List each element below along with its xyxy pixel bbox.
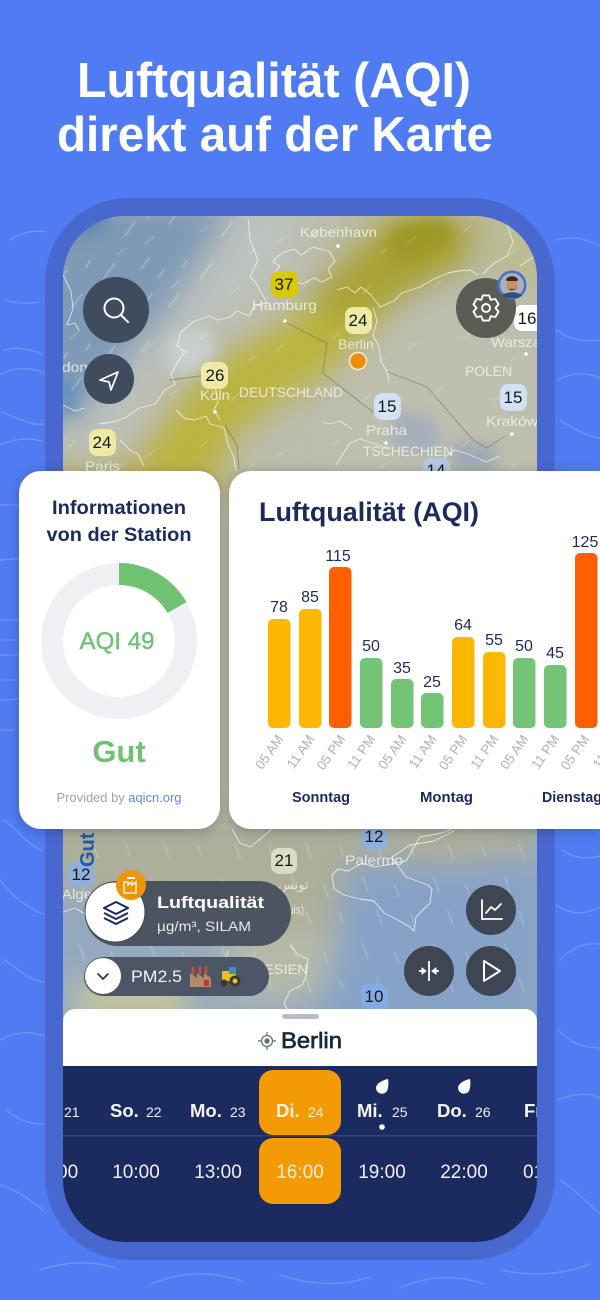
location header: [63, 1009, 537, 1066]
navigation button: [84, 354, 134, 404]
station title: von der Station: [46, 524, 192, 546]
time axis labels: 05 PM: [436, 732, 470, 773]
chart button: [466, 885, 516, 935]
bar values: 115: [325, 548, 351, 565]
map colour fields: north: [40, 200, 560, 485]
time axis labels: 11 PM: [528, 732, 562, 772]
phone frame: [45, 198, 555, 1260]
time axis labels: 05 AM: [497, 732, 531, 772]
map colour fields: south: [63, 829, 537, 1019]
bar values: 85: [301, 589, 319, 606]
title: [57, 54, 493, 162]
bar values: 35: [393, 660, 411, 677]
city labels: Paris: [85, 458, 120, 474]
AQI donut gauge: [52, 563, 186, 708]
divider: [63, 1135, 537, 1136]
bar values: [270, 534, 598, 691]
city labels: [62, 224, 541, 977]
day labels: Mi.: [357, 1100, 383, 1121]
bar values: 25: [423, 674, 441, 691]
time axis labels: 05 AM: [252, 732, 286, 772]
target icon: [258, 1032, 276, 1050]
value badges: 12: [72, 865, 90, 884]
bar values: 55: [485, 632, 503, 649]
city labels: ESIEN: [264, 961, 308, 977]
time axis labels: 05 PM: [314, 732, 348, 773]
day labels: Di.: [276, 1100, 300, 1121]
hour labels: 00: [57, 1162, 78, 1183]
pollutant selector pill: [84, 957, 269, 996]
compare button: [404, 946, 454, 996]
city labels: Kraków: [486, 413, 539, 429]
rain drops: [376, 1079, 470, 1130]
time axis labels: [252, 732, 600, 773]
day labels: Do.: [437, 1100, 467, 1121]
tractor icon: [220, 967, 240, 986]
bottom sheet: timeline: 25: [392, 1104, 408, 1120]
city labels: uis): [288, 902, 304, 917]
selected day and time tiles: [259, 1070, 341, 1135]
day labels: [292, 790, 600, 806]
city labels: København: [300, 224, 377, 240]
value badges: 21: [275, 851, 293, 870]
layer pill: Luftqualität: Luftqualität: [157, 893, 264, 912]
bar values: 50: [362, 638, 380, 655]
title: direkt auf der Karte: [57, 108, 493, 162]
layer pill: Luftqualität: µg/m³, SILAM: [157, 918, 251, 934]
station title: [46, 497, 192, 546]
city labels: Köln: [200, 387, 230, 403]
hour labels: 10:00: [112, 1162, 160, 1183]
rotated label Gut: Gut: [77, 832, 99, 867]
city labels: don: [62, 359, 88, 375]
city dots: [213, 244, 528, 445]
hour labels: 13:00: [194, 1162, 242, 1183]
wind streaks: [63, 216, 537, 1019]
value badges: 24: [349, 311, 367, 330]
city labels: POLEN: [465, 363, 512, 379]
value badges: 14: [427, 461, 445, 480]
search button: [83, 277, 149, 343]
bar values: 50: [515, 638, 533, 655]
bars: [268, 553, 598, 728]
hour labels: [63, 1164, 537, 1178]
bar values: 125: [572, 534, 598, 551]
day labels: Montag: [420, 790, 473, 806]
day labels: [110, 1104, 537, 1117]
right card: AQI bar chart: [229, 471, 600, 829]
bottom sheet: timeline: 21: [64, 1104, 80, 1120]
settings button: [456, 278, 516, 338]
status Gut: Gut: [92, 734, 146, 769]
provider credit: Provided by aqicn.org: [56, 791, 182, 805]
user avatar: [498, 270, 526, 300]
time axis labels: 05 AM: [375, 732, 409, 772]
time axis labels: 11 AM: [284, 732, 317, 771]
chart title: Luftqualität (AQI): [259, 497, 479, 527]
city labels: DEUTSCHLAND: [239, 384, 343, 400]
city labels: Warsza: [491, 334, 541, 350]
value badges: 26: [206, 366, 224, 385]
bottom sheet: timeline: 22: [146, 1104, 162, 1120]
day labels: Sonntag: [292, 790, 350, 806]
city labels: Hamburg: [252, 297, 317, 313]
hour labels: 16:00: [276, 1162, 324, 1183]
location header: Berlin: [281, 1028, 342, 1053]
value badges: 16: [518, 309, 536, 328]
selected location marker: [350, 352, 366, 370]
day labels: Fr: [524, 1100, 542, 1121]
value badges: 10: [365, 987, 383, 1006]
station title: Informationen: [52, 497, 186, 519]
factory icon: [190, 966, 211, 987]
value badges: 37: [275, 275, 293, 294]
play button: [466, 946, 516, 996]
layers icon: [104, 902, 128, 924]
hour labels: 01: [523, 1162, 544, 1183]
map screen: [63, 216, 537, 1020]
bottom sheet: timeline: 24: [308, 1104, 324, 1120]
city labels: Berlin: [338, 336, 374, 352]
AQI donut gauge: AQI 49: [80, 628, 154, 655]
left card: station info: [19, 471, 220, 829]
value badges: 12: [365, 827, 383, 846]
bottom sheet: timeline: [57, 1009, 544, 1242]
value badges: 15: [504, 388, 522, 407]
city labels: Alge: [62, 886, 92, 902]
hour labels: 19:00: [358, 1162, 406, 1183]
city labels: Palermo: [345, 852, 403, 868]
bar values: 45: [546, 645, 564, 662]
value badges: 15: [378, 397, 396, 416]
bar values: 78: [270, 599, 288, 616]
city labels: تونس: [278, 877, 309, 893]
time axis labels: 05 PM: [558, 732, 592, 773]
time axis labels: 11 PM: [344, 732, 378, 772]
day labels: So.: [110, 1100, 139, 1121]
city labels: Praha: [366, 422, 407, 438]
time axis labels: 11 AM: [406, 732, 439, 771]
bottom sheet: timeline: 26: [475, 1104, 491, 1120]
title: Luftqualität (AQI): [77, 54, 471, 108]
value badges: 24: [93, 433, 111, 452]
coastlines and borders: [63, 218, 538, 470]
bottom sheet: timeline: 23: [230, 1104, 246, 1120]
value badges: [68, 271, 544, 1011]
orange factory badge: [116, 870, 146, 900]
layer pill: Luftqualität: [85, 870, 291, 946]
bar values: 64: [454, 617, 472, 634]
city labels: TSCHECHIEN: [363, 443, 453, 459]
pollutant selector pill: PM2.5: [131, 967, 182, 986]
hour labels: 22:00: [440, 1162, 488, 1183]
day labels: Mo.: [190, 1100, 222, 1121]
time axis labels: 11 PM: [467, 732, 501, 772]
